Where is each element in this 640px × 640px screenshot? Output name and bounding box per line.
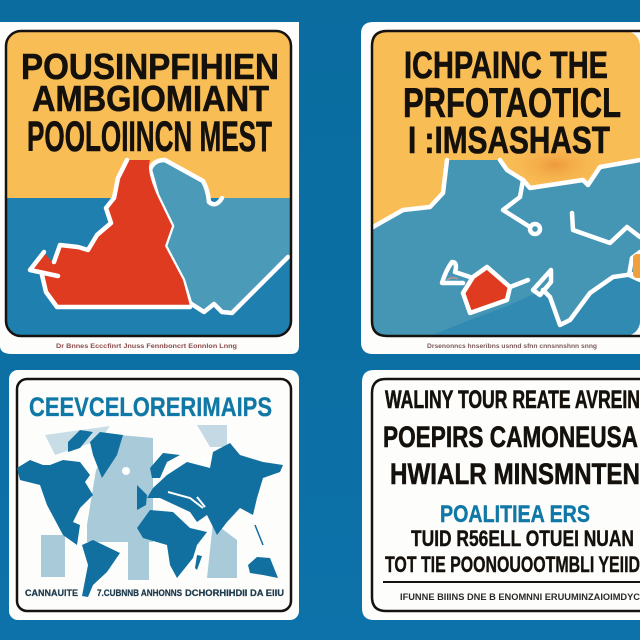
heading: [383, 386, 640, 491]
south america: [82, 540, 120, 597]
subheading: POALITIEA ERS: [440, 501, 590, 528]
body text: [385, 526, 640, 577]
chart: pale bars behind map: [41, 425, 237, 580]
heading: AMBGIOMIANT: [32, 78, 269, 119]
map scene: [372, 31, 640, 336]
map: world: [17, 430, 283, 597]
panel: top right poster: [361, 22, 640, 354]
heading: CEEVCELORERIMAIPS: [29, 392, 272, 422]
panel: top left poster: [0, 22, 299, 354]
baffin island: [68, 430, 93, 452]
scandinavia: [150, 453, 180, 478]
map region: orange patch: [633, 254, 640, 278]
north america: [17, 460, 93, 545]
map region: darker sea: [430, 273, 640, 336]
eurasia: [147, 443, 283, 535]
map region: blue land: [150, 160, 292, 313]
map: white inland details: [122, 467, 130, 475]
australia: [248, 557, 278, 578]
map region: red land: [33, 160, 190, 306]
map strokes: coast and inland lines: [373, 160, 640, 325]
heading: POOLOIINCN MEST: [27, 113, 272, 161]
frame: [372, 31, 640, 336]
map region: red land: [463, 267, 510, 313]
caption: Dr Bnnes Ecccfinrt Jnuss Fennboncrt Eonnlon Lnng: [56, 343, 237, 350]
map strokes: western island: [442, 262, 470, 283]
africa: [137, 510, 207, 578]
caption: 7.CUBNNB ANHONNS: [97, 588, 182, 598]
western europe: [137, 485, 147, 510]
caption: CANNAUITE: [25, 588, 78, 598]
map region: blue sea and land: [372, 160, 640, 336]
caption: Drsenonncs hnseribns usnnd sfnn cnnsnnshnn snng: [427, 343, 597, 350]
heading: POUSINPFIHIEN: [21, 46, 279, 87]
panel: bottom right poster: [362, 370, 640, 620]
heading: [21, 46, 279, 161]
frame: [6, 31, 291, 336]
caption: DCHORHIHDII DA EIIU: [185, 588, 284, 598]
map scene: yellow and blue background: [6, 31, 292, 336]
panel: bottom left poster: [9, 370, 299, 620]
caption: IFUNNE BIIINS DNE B ENOMNNI ERUUMINZAIOIMDYC: [400, 592, 640, 603]
caption: [25, 588, 284, 598]
greenland: [90, 432, 123, 478]
madagascar: [195, 555, 202, 570]
heading: [403, 45, 621, 162]
orange glow: [527, 150, 584, 180]
